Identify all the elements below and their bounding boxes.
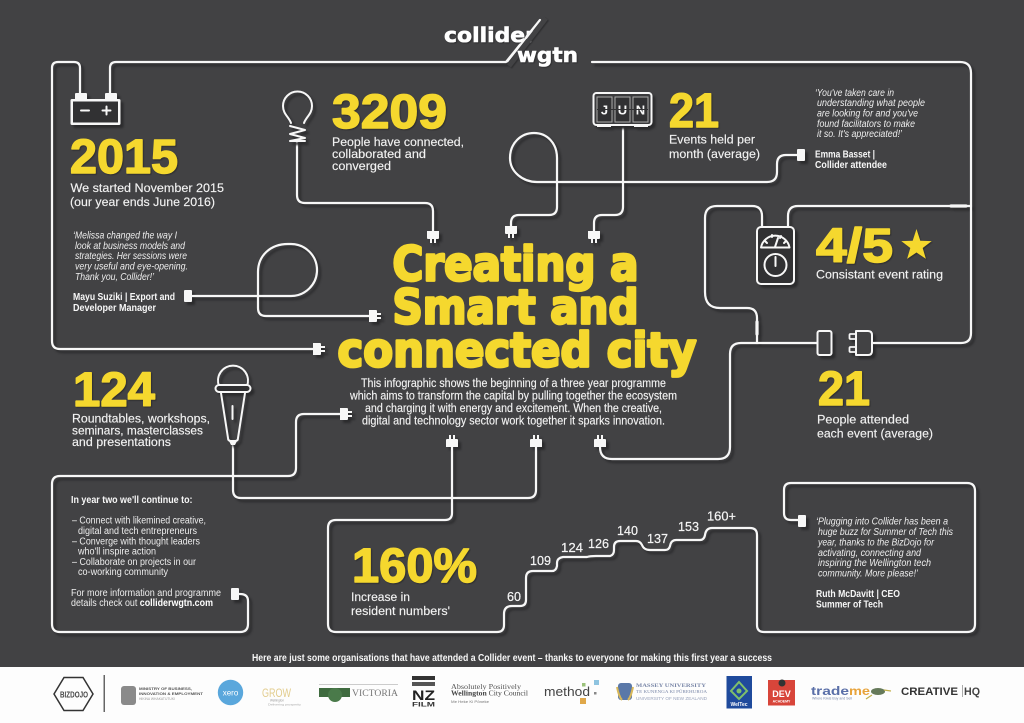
stat: 160% residents: [351, 539, 477, 618]
logo: Xero: xero: [223, 688, 239, 698]
title: connected city: [338, 324, 696, 378]
stat: 160% residents: 160%: [352, 539, 477, 593]
title: Creating a: [392, 238, 638, 292]
logo: Grow Wellington: Delivering prosperity: [268, 702, 302, 706]
quote: Emma: [815, 88, 925, 171]
quote: Ruth: Summer of Tech: [816, 600, 883, 610]
logo: Ministry of Business: MINISTRY OF BUSINESS,: [139, 686, 192, 691]
chart labels: resident numbers: 153: [678, 520, 699, 534]
wire: microphone to plug: [233, 435, 542, 498]
quote: Emma: ‘You've taken care in: [815, 88, 894, 99]
stat: 124 sessions: Roundtables, workshops,: [72, 412, 210, 426]
icon: flip calendar JUN: U: [618, 102, 627, 118]
icon: flip calendar JUN: [594, 93, 652, 127]
panel: year two plans: digital and tech entrepreneurs: [78, 526, 197, 537]
panel: year two plans: – Converge with thought leaders: [72, 536, 200, 548]
chart labels: resident numbers: 60: [507, 590, 521, 604]
quote: Emma: understanding what people: [817, 98, 925, 109]
wire: residents step line chart: [328, 435, 975, 632]
logo: Trade Me: Where Kiwis Buy and Sell: [812, 696, 852, 700]
wire: calendar to plug: [588, 125, 623, 243]
quote: Ruth: Ruth McDavitt | CEO: [816, 589, 900, 600]
stat: 21 events per month: Events held per: [669, 132, 755, 146]
logo: Wellington City Council: Wellington City Council: [451, 690, 528, 698]
icon: battery: [70, 93, 120, 125]
logo: NZ Film: [412, 676, 436, 708]
logo: Method: method: [544, 685, 590, 699]
logo: Dev Academy: ACADEMY: [773, 700, 791, 704]
footer thank-you line: Here are just some organisations that have attended a Collider event – thanks to everyone for making this first year a success: [252, 653, 772, 664]
stat: 21 events per month: [669, 84, 760, 161]
quote: Emma: it so. It's appreciated!’: [817, 129, 903, 140]
logo: BizDojo: BIZDOJO: [60, 690, 88, 700]
logo: Wellington City Council: [451, 683, 528, 704]
chart labels: resident numbers: 124: [561, 541, 583, 555]
chart labels: resident numbers: 140: [617, 524, 638, 538]
stat: 124 sessions: seminars, masterclasses: [72, 424, 203, 438]
quote: Ruth: community. More please!’: [818, 568, 919, 580]
stat: 21 people per event: [817, 362, 933, 440]
title: Smart and: [392, 280, 638, 336]
stat: 3209: collaborated and: [332, 147, 426, 161]
quote: Melissa: Thank you, Collider!’: [75, 272, 155, 283]
panel: year two plans: In year two we'll continue to:: [71, 495, 192, 506]
stat: 4/5 event rating: 4/5: [816, 219, 893, 273]
logo: Wellington City Council: Me Heke Ki Pōneke: [451, 700, 489, 704]
quote: Emma: Collider attendee: [815, 160, 887, 171]
quote: Melissa: Developer Manager: [73, 303, 156, 314]
quote: Ruth: year, thanks to the BizDojo for: [817, 538, 935, 548]
quote: Ruth: activating, connecting and: [818, 548, 921, 559]
logo: Massey University: MASSEY UNIVERSITY: [636, 684, 706, 689]
logo: Creative HQ: [901, 685, 980, 698]
logo: Grow Wellington: [262, 686, 302, 706]
logo: Ministry of Business: [121, 686, 204, 705]
stat: 3209: People have connected,: [332, 135, 464, 149]
panel: year two plans: co-working community: [78, 567, 168, 578]
panel: year two plans: – Collaborate on projects in our: [72, 557, 197, 568]
logo: collider wgtn: [444, 18, 578, 67]
quote: Melissa: Mayu Suziki | Export and: [73, 292, 175, 303]
circuit wires and plugs: [52, 20, 975, 632]
quote: Melissa: very useful and eye-opening.: [75, 262, 188, 272]
logo: Method: [544, 680, 599, 704]
stat: 21 people per event: 21: [818, 362, 870, 416]
panel: year two plans: details check out colliderwgtn.com: [71, 598, 213, 609]
panel: year two plans: For more information and programme: [71, 588, 221, 599]
panel: year two plans: [71, 495, 221, 609]
stat: 4/5 event rating: [816, 219, 943, 282]
wire: bulb to plug: [297, 142, 439, 243]
wire: battery positive to logo: [110, 20, 540, 93]
intro paragraph: [349, 376, 677, 428]
logo: Trade Me: [811, 684, 891, 700]
logo: Grow Wellington: GROW: [262, 686, 291, 700]
quote: Emma: found facilitators to make: [817, 119, 915, 130]
logo: Ministry of Business: INNOVATION & EMPLOYMENT: [139, 691, 204, 696]
quote: Emma: Emma Basset |: [815, 150, 875, 160]
stat: 2015: 2015: [70, 130, 178, 184]
stat: 160% residents: Increase in: [351, 590, 410, 604]
logo: Massey University: [617, 683, 708, 701]
logo: Trade Me: me: [849, 684, 870, 698]
stat: 2015: We started November 2015: [70, 181, 224, 195]
stat: 21 events per month: 21: [669, 84, 719, 138]
panel: year two plans: – Connect with likemined creative,: [72, 516, 206, 526]
wire: meter right lead: [788, 206, 971, 227]
intro paragraph: This infographic shows the beginning of a three year programme: [361, 376, 666, 390]
quote: Ruth: inspiring the Wellington tech: [818, 558, 931, 569]
chart labels: resident numbers: [507, 510, 736, 604]
quote: Melissa: ‘Melissa changed the way I: [73, 230, 177, 242]
intro paragraph: and charging it with energy and excitement. When the creative,: [365, 401, 662, 415]
icon: rating meter: [757, 227, 794, 284]
icon: microphone: [216, 366, 250, 445]
intro paragraph: which aims to transform the capital by pulling together the ecosystem: [349, 388, 677, 402]
stat: 124 sessions: 124: [73, 363, 155, 417]
sponsor logo strip: [0, 667, 1024, 723]
logo: Victoria: [319, 684, 399, 702]
stat: 160% residents: resident numbers': [351, 604, 450, 618]
icon: light bulb: [283, 92, 312, 141]
chart labels: resident numbers: 109: [530, 554, 551, 568]
wire: meter left lead: [705, 206, 762, 343]
stat: 3209: 3209: [332, 85, 447, 139]
quote: Melissa: [73, 230, 188, 314]
logo: Creative HQ: CREATIVE: [901, 686, 958, 698]
panel: year two plans: who'll inspire action: [77, 546, 156, 558]
logo: Dev Academy: DEV: [772, 689, 791, 699]
logo: Creative HQ: HQ: [964, 686, 980, 698]
quote: Ruth: ‘Plugging into Collider has been a: [816, 516, 948, 528]
chart labels: resident numbers: 160+: [707, 510, 736, 524]
quote: Melissa: strategies. Her sessions were: [75, 251, 187, 262]
chart labels: resident numbers: 126: [588, 537, 609, 551]
stat: 3209: converged: [332, 159, 391, 173]
intro paragraph: digital and technology sector work together it sparks innovation.: [362, 414, 665, 428]
logo: collider wgtn: wgtn: [517, 43, 578, 67]
logo: NZ Film: NZ: [412, 687, 436, 703]
logo: Victoria: VICTORIA: [352, 688, 399, 698]
wire: Emma quote loop: [505, 133, 805, 238]
stat: 2015: [70, 130, 224, 209]
logo: Xero: [218, 680, 243, 705]
logo: WelTec: WelTec: [730, 702, 748, 708]
stat: 21 people per event: People attended: [817, 412, 909, 426]
stat: 124 sessions: [72, 363, 210, 449]
icon: flip calendar JUN: N: [636, 102, 645, 118]
logo: Massey University: TE KUNENGA KI PŪREHUROA: [636, 689, 707, 694]
logo: WelTec: [726, 676, 752, 708]
stat: 4/5 event rating: Consistant event rating: [816, 268, 943, 282]
quote: Melissa: look at business models and: [75, 241, 185, 252]
chart labels: resident numbers: 137: [647, 532, 668, 546]
icon: flip calendar JUN: J: [601, 102, 608, 118]
quote: Ruth: [816, 516, 953, 610]
logo: Grow Wellington: Wellington: [270, 698, 284, 702]
stat: 2015: (our year ends June 2016): [70, 195, 215, 209]
socket and wire to bottom plug: [594, 331, 832, 459]
logo: NZ Film: FILM: [412, 702, 435, 708]
wire: logo to male plug on right: [592, 62, 971, 355]
logo: Wellington City Council: Absolutely Positively: [451, 683, 522, 691]
logo: BizDojo: [54, 675, 105, 712]
title: [338, 238, 696, 378]
stat: 21 events per month: month (average): [669, 147, 760, 161]
stat: 21 people per event: each event (average): [817, 426, 933, 440]
stat: 124 sessions: and presentations: [72, 435, 171, 449]
logo: Ministry of Business: HIKINA WHAKATUTUKI: [139, 697, 175, 701]
quote: Ruth: huge buzz for Summer of Tech this: [818, 527, 953, 538]
logo: Dev Academy: [768, 680, 795, 706]
quote: Emma: are looking for and you've: [817, 108, 918, 120]
logo: collider wgtn: collider: [444, 23, 536, 47]
wire: battery negative to left plug: [52, 62, 325, 355]
wire: year two panel outline: [52, 408, 352, 632]
stat: 3209: [332, 85, 464, 173]
logo: Massey University: UNIVERSITY OF NEW ZEALAND: [636, 696, 708, 701]
logo: Trade Me: trade: [811, 684, 849, 698]
wire: Mayu quote loop: [184, 244, 381, 322]
